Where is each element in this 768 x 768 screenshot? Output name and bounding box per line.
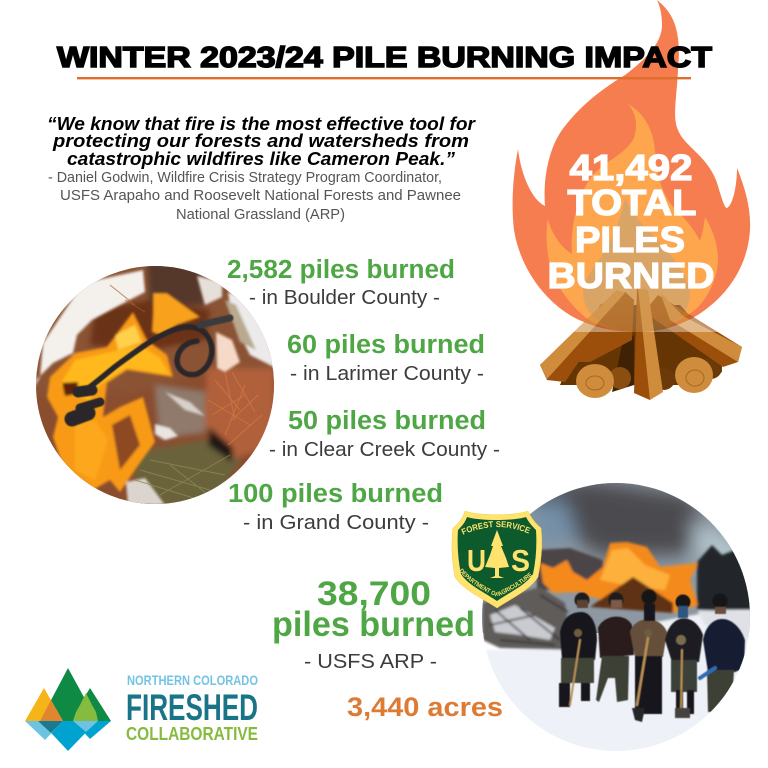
USFS ARP stat: - USFS ARP - [304, 650, 437, 673]
county stat: Boulder: - in Boulder County - [249, 286, 440, 309]
photo: crew in front of burning pile [482, 480, 752, 755]
quote attribution: - Daniel Godwin, Wildfire Crisis Strategy Program Coordinator, [48, 170, 442, 186]
flame total label: BURNED [548, 255, 714, 296]
quote: protecting our forests and watersheds from [52, 131, 469, 151]
core flame [583, 197, 690, 332]
shield letters and tree: FOREST SERVICE [461, 521, 530, 535]
quote [47, 114, 476, 169]
fire [540, 542, 698, 613]
quote attribution: National Grassland (ARP) [176, 207, 345, 223]
county stat: Grand: - in Grand County - [243, 511, 429, 534]
shield letters and tree [460, 521, 532, 596]
county stat: Grand: 100 piles burned [228, 480, 443, 508]
log ends [576, 364, 614, 398]
county stat: Grand [228, 480, 443, 534]
slash pile [483, 587, 572, 650]
flame total label: 41,492 [570, 147, 692, 188]
quote: catastrophic wildfires like Cameron Peak.” [67, 149, 455, 169]
shield letters and tree: U [467, 543, 486, 578]
needle texture [110, 285, 262, 445]
logo wordmark: NORTHERN COLORADO [127, 672, 258, 688]
logo wordmark: FIRESHED [126, 686, 258, 728]
snow [30, 270, 145, 395]
tools and gloves [570, 629, 715, 722]
acres stat: 3,440 acres [347, 692, 503, 722]
county stat: Clear Creek: 50 piles burned [288, 407, 486, 435]
quote attribution [48, 170, 461, 223]
flames [152, 293, 200, 335]
county stat: Boulder: 2,582 piles burned [227, 256, 455, 284]
title underline [77, 77, 691, 79]
county stat: Clear Creek [269, 407, 500, 461]
crossed logs [575, 292, 634, 362]
drip torch [72, 318, 230, 419]
flame total label: PILES [575, 219, 685, 260]
county stat: Clear Creek: - in Clear Creek County - [269, 438, 500, 461]
background tones [147, 262, 205, 305]
logo mountains mark [25, 668, 111, 751]
title: WINTER 2023/24 PILE BURNING IMPACT [57, 42, 712, 74]
logs [540, 288, 742, 400]
shield letters and tree: DEPARTMENT OF AGRICULTURE [460, 568, 532, 596]
inner flame [546, 104, 718, 332]
county stat: Larimer: 60 piles burned [287, 331, 485, 359]
county stat: Larimer [287, 331, 485, 385]
flame total label [548, 147, 714, 296]
flame illustration with logs [513, 0, 750, 400]
tree line [537, 548, 603, 590]
ground snow [482, 610, 752, 755]
quote: “We know that fire is the most effective tool for [47, 114, 476, 134]
icon: US Forest Service shield [452, 510, 542, 608]
USFS ARP stat: piles burned [272, 605, 475, 644]
USFS ARP stat [272, 575, 475, 673]
logo wordmark: COLLABORATIVE [126, 724, 258, 744]
logo: Northern Colorado Fireshed Collaborative [25, 668, 258, 751]
crew members [559, 590, 745, 722]
logs back [560, 305, 722, 385]
logo wordmark [126, 672, 258, 744]
outer flame [513, 0, 750, 332]
quote attribution: USFS Arapaho and Roosevelt National Forests and Pawnee [60, 188, 461, 204]
photo: burning pile with drip torch [30, 262, 276, 505]
county stat: Larimer: - in Larimer County - [290, 362, 484, 385]
county stat: Boulder [227, 256, 455, 309]
shield letters and tree: S [511, 543, 530, 578]
USFS ARP stat: 38,700 [317, 575, 431, 613]
flame total label: TOTAL [568, 182, 696, 223]
